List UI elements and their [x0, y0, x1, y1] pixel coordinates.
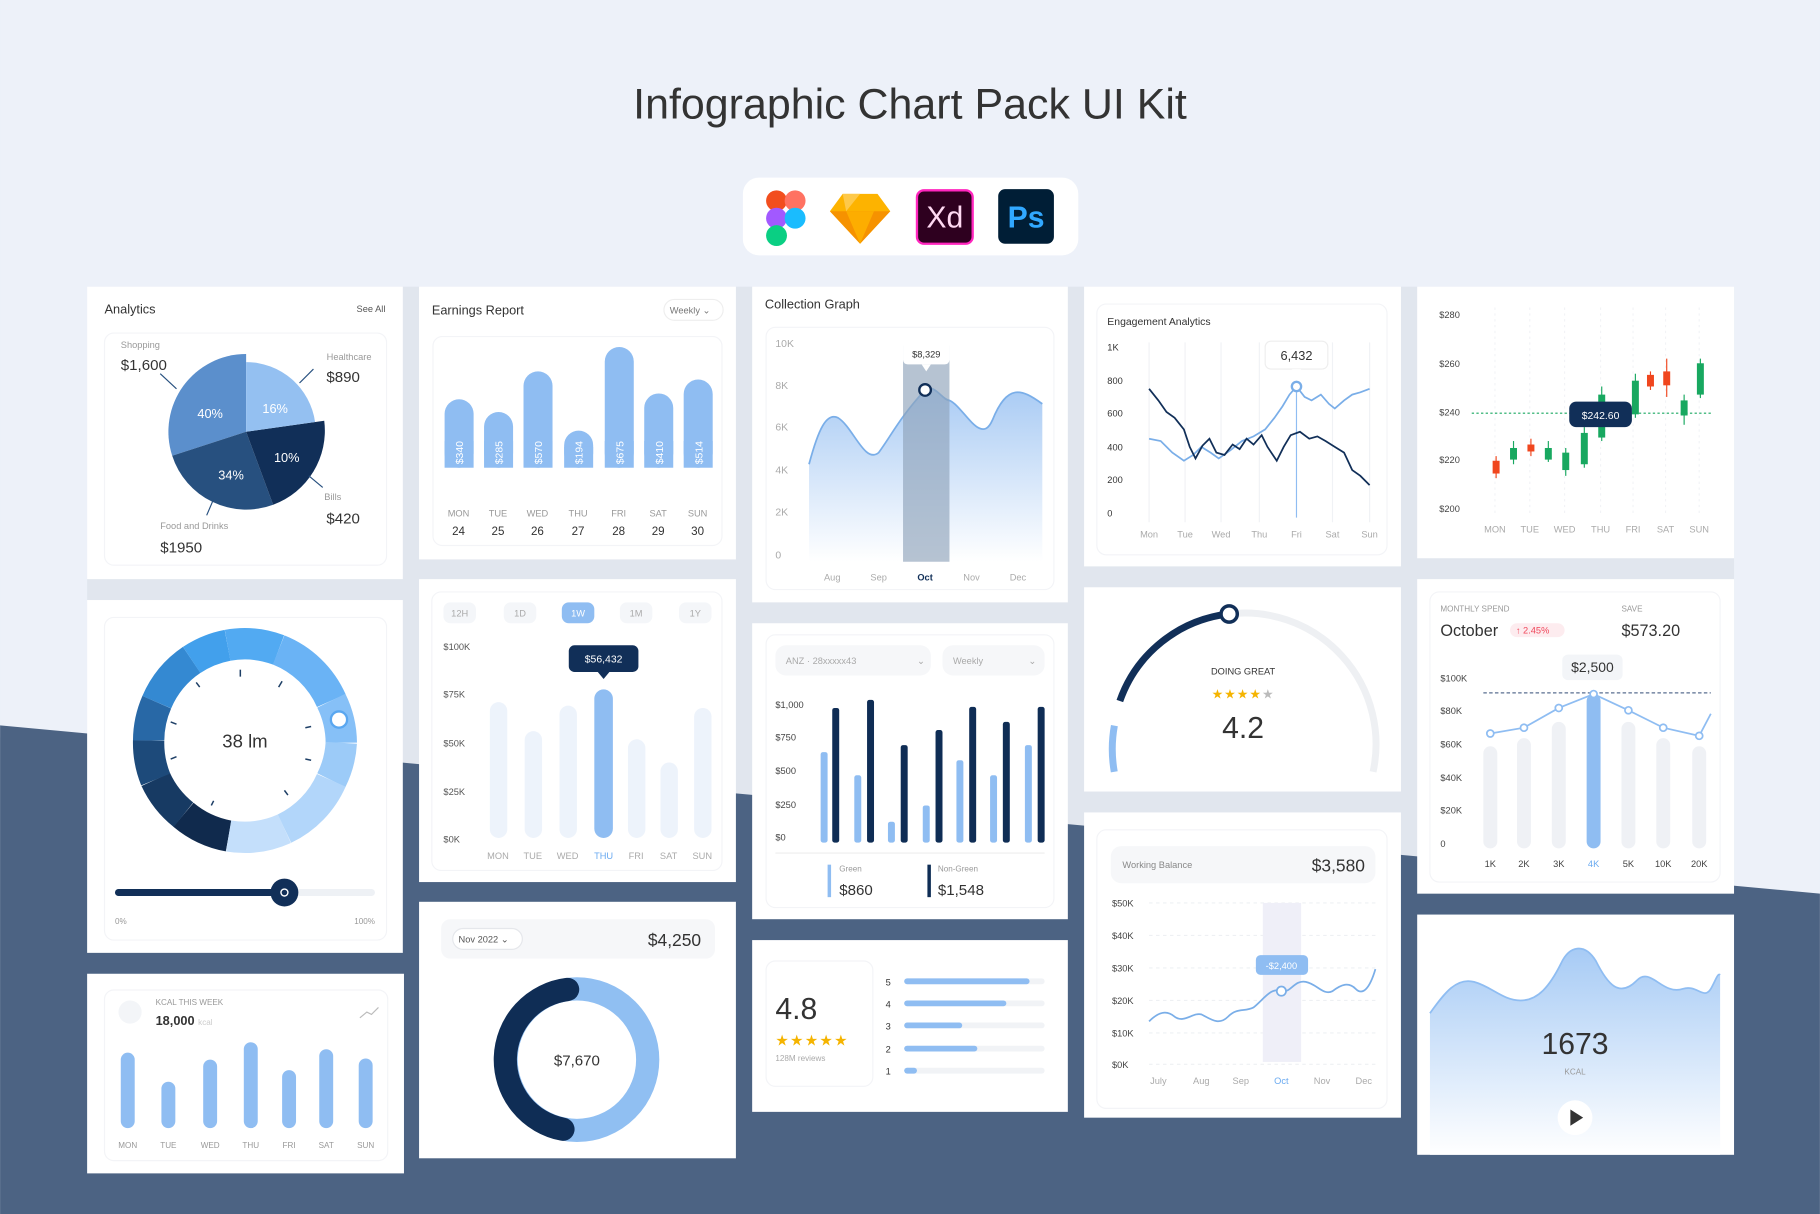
panel: earnings report: SUN	[688, 508, 707, 518]
panel: collection graph: 4K	[775, 466, 788, 477]
panel: working balance: $50K	[1112, 898, 1134, 908]
panel: analytics pie: Healthcare	[327, 352, 371, 362]
panel: revenue bars: 1W	[571, 608, 585, 618]
panel: engagement analytics: 800	[1107, 376, 1123, 386]
panel: analytics pie: $420	[326, 510, 360, 527]
slider: 100%	[354, 917, 375, 926]
panel: kcal week: THU	[242, 1141, 259, 1150]
panel: earnings report: THU	[569, 508, 588, 518]
panel: monthly spend: SAVE	[1621, 605, 1643, 614]
panel: revenue bars: WED	[557, 851, 579, 861]
slider: 0%	[115, 917, 127, 926]
panel: earnings report: $285	[495, 441, 506, 464]
panel: rating: 5	[886, 977, 891, 987]
panel: green bars: Weekly	[953, 656, 984, 666]
panel: monthly spend: 20K	[1691, 859, 1708, 869]
panel: kcal wave	[1417, 915, 1734, 1155]
panel: green bars: ANZ · 28xxxxx43	[786, 656, 856, 666]
panel: collection graph	[752, 287, 1068, 602]
panel: monthly spend: 10K	[1655, 859, 1672, 869]
panel: working balance: $30K	[1112, 963, 1134, 973]
panel: green bars: ⌄	[1028, 656, 1036, 666]
panel: donut: $4,250	[648, 930, 701, 950]
panel: monthly spend: $573.20	[1621, 622, 1680, 640]
panel: donut: $7,670	[554, 1052, 600, 1069]
panel: ring gauge	[87, 600, 403, 953]
panel: rating: ★★★★★	[775, 1033, 849, 1050]
panel: monthly spend: $60K	[1440, 739, 1463, 749]
panel: engagement analytics	[1084, 287, 1401, 566]
panel: revenue bars: FRI	[629, 851, 644, 861]
panel: monthly spend: MONTHLY SPEND	[1440, 605, 1510, 614]
panel: candlestick: $220	[1439, 455, 1460, 465]
panel: earnings report: $194	[575, 441, 586, 464]
pie chart: 34%	[218, 467, 244, 482]
icon: figma	[766, 190, 806, 246]
panel: candlestick: FRI	[1626, 525, 1641, 535]
tooltip: $8,329	[912, 349, 940, 359]
panel: earnings report: 27	[572, 525, 585, 538]
panel: engagement analytics: Fri	[1291, 529, 1302, 539]
panel: candlestick: SUN	[1689, 525, 1709, 535]
tooltip	[569, 645, 638, 679]
panel: green bars: $750	[775, 732, 796, 742]
panel: donut: Nov 2022 ⌄	[459, 934, 509, 944]
panel: earnings report: $675	[615, 441, 626, 464]
panel: rating: 1	[886, 1067, 891, 1077]
panel: kcal wave: KCAL	[1564, 1068, 1586, 1077]
panel: engagement analytics: Mon	[1140, 529, 1158, 539]
panel: rating: 4.8	[775, 993, 817, 1026]
panel: analytics pie: Bills	[324, 492, 342, 502]
panel: revenue bars: 1Y	[690, 608, 701, 618]
panel: working balance: Aug	[1193, 1076, 1210, 1086]
panel: working balance: $0K	[1112, 1060, 1129, 1070]
panel: earnings report: 28	[612, 525, 625, 538]
panel: revenue bars: SAT	[660, 851, 678, 861]
panel: revenue bars: 1M	[630, 608, 643, 618]
icon: play	[1558, 1100, 1592, 1135]
panel: engagement analytics: 1K	[1107, 343, 1119, 353]
panel: earnings report: Earnings Report	[432, 303, 524, 318]
panel: earnings report: WED	[527, 508, 549, 518]
panel: kcal week: 18,000 kcal	[156, 1013, 213, 1028]
panel: monthly spend: 0	[1440, 839, 1446, 849]
panel: collection graph: 8K	[775, 381, 788, 392]
pie chart: 10%	[274, 450, 300, 465]
panel: collection graph: Dec	[1010, 572, 1027, 582]
panel: green bars: $1,000	[775, 700, 804, 710]
panel: candlestick: SAT	[1657, 525, 1675, 535]
panel: rating: 128M reviews	[775, 1054, 825, 1063]
panel: green bars: $0	[775, 832, 786, 842]
panel: green bars: $1,548	[938, 882, 984, 899]
panel: collection graph: Oct	[917, 572, 933, 582]
panel: ring gauge: 38 lm	[222, 730, 268, 751]
panel: revenue bars: $50K	[443, 738, 466, 748]
panel: analytics pie: $890	[326, 369, 360, 386]
panel: working balance: Sep	[1233, 1076, 1249, 1086]
panel: monthly spend: 5K	[1623, 859, 1635, 869]
panel: engagement analytics: 600	[1107, 409, 1123, 419]
panel: working balance: Oct	[1274, 1076, 1289, 1086]
panel: working balance	[1084, 812, 1401, 1118]
panel: working balance: Working Balance	[1122, 860, 1192, 870]
panel: rating: 3	[886, 1021, 891, 1031]
slider	[115, 879, 375, 926]
icon: ps	[998, 189, 1054, 244]
panel: collection graph: 0	[775, 550, 781, 561]
panel: monthly spend: 2K	[1518, 859, 1530, 869]
pie chart: 40%	[197, 406, 223, 421]
panel: half gauge: 4.2	[1222, 712, 1264, 745]
panel: collection graph: Sep	[870, 572, 887, 582]
panel: earnings report: 29	[652, 525, 665, 538]
price label: $242.60	[1582, 411, 1620, 422]
panel: analytics pie: Analytics	[105, 301, 156, 316]
icon: xd	[917, 190, 973, 244]
panel: monthly spend: $20K	[1440, 806, 1463, 816]
tooltip: 6,432	[1281, 348, 1312, 363]
panel: candlestick: $280	[1439, 310, 1460, 320]
panel: candlestick: $200	[1439, 504, 1460, 514]
panel: monthly spend: $40K	[1440, 773, 1463, 783]
panel: kcal week: SAT	[319, 1141, 334, 1150]
panel: donut	[419, 902, 736, 1158]
panel: earnings report: 25	[492, 525, 504, 538]
panel: monthly spend: $100K	[1440, 673, 1468, 683]
panel: green bars: $500	[775, 766, 796, 776]
panel: analytics pie: Shopping	[121, 340, 160, 350]
panel: revenue bars	[419, 579, 736, 882]
panel: monthly spend	[1417, 579, 1734, 894]
panel: rating: 2	[886, 1045, 891, 1055]
panel: working balance: $10K	[1112, 1028, 1134, 1038]
panel: engagement analytics: Sat	[1326, 529, 1340, 539]
panel: candlestick: MON	[1484, 525, 1506, 535]
tooltip: $2,500	[1571, 659, 1614, 675]
panel: revenue bars: $0K	[443, 835, 461, 845]
tooltip: -$2,400	[1266, 961, 1297, 971]
ring	[149, 644, 341, 837]
panel: candlestick: THU	[1591, 525, 1610, 535]
panel: engagement analytics: Tue	[1177, 529, 1193, 539]
panel: working balance: July	[1150, 1076, 1167, 1086]
panel: revenue bars: SUN	[692, 851, 712, 861]
panel: candlestick: $260	[1439, 359, 1460, 369]
panel: analytics pie: $1,600	[121, 357, 167, 374]
panel: revenue bars: $75K	[443, 690, 466, 700]
panel: candlestick: WED	[1554, 525, 1576, 535]
panel: half gauge: ★★★★★	[1212, 687, 1275, 702]
panel: earnings report: $340	[455, 441, 466, 464]
panel: kcal wave: 1673	[1541, 1028, 1609, 1061]
panel: rating	[752, 940, 1068, 1112]
panel: analytics pie	[87, 287, 403, 579]
panel: monthly spend: 1K	[1485, 859, 1497, 869]
panel: candlestick	[1417, 287, 1734, 558]
panel: collection graph: 2K	[775, 507, 788, 518]
panel: revenue bars: $100K	[443, 642, 471, 652]
price label	[1569, 402, 1632, 427]
panel: revenue bars: TUE	[524, 851, 542, 861]
tool icons	[743, 178, 1078, 255]
panel: green bars: $250	[775, 800, 796, 810]
panel: revenue bars: MON	[487, 851, 509, 861]
panel: engagement analytics: 400	[1107, 442, 1123, 452]
panel: kcal week: KCAL THIS WEEK	[156, 998, 224, 1007]
panel: revenue bars: 1D	[514, 608, 526, 618]
panel: kcal week: SUN	[357, 1141, 374, 1150]
panel: collection graph: Aug	[824, 572, 840, 582]
panel: green bars: ⌄	[917, 656, 925, 666]
icon: xd: Xd	[926, 201, 963, 234]
panel: revenue bars: THU	[594, 851, 613, 861]
panel: working balance: Nov	[1314, 1076, 1331, 1086]
panel: monthly spend: ↑ 2.45%	[1516, 626, 1549, 636]
panel: collection graph: Nov	[963, 572, 980, 582]
panel: earnings report	[419, 287, 736, 559]
panel: engagement analytics: 200	[1107, 475, 1123, 485]
panel: revenue bars: 12H	[451, 608, 468, 618]
panel: earnings report: $410	[655, 441, 666, 464]
panel: half gauge	[1084, 587, 1401, 792]
panel: collection graph: 10K	[775, 339, 794, 350]
panel: rating: 4	[886, 999, 891, 1009]
panel: revenue bars: $25K	[443, 787, 466, 797]
panel: earnings report: 26	[531, 525, 544, 538]
panel: analytics pie: Food and Drinks	[160, 521, 229, 531]
panel: candlestick: TUE	[1520, 525, 1539, 535]
panel: engagement analytics: Wed	[1212, 529, 1230, 539]
panel: candlestick: $240	[1439, 407, 1460, 417]
pie chart: 16%	[262, 401, 288, 416]
panel: green bars: $860	[839, 882, 873, 899]
panel: green bars	[752, 623, 1068, 919]
panel: working balance: $3,580	[1312, 856, 1365, 876]
pie chart	[160, 354, 325, 515]
panel: earnings report: MON	[448, 508, 469, 518]
panel: kcal week: WED	[201, 1141, 220, 1150]
panel: monthly spend: $80K	[1440, 706, 1463, 716]
panel: collection graph: 6K	[775, 423, 788, 434]
panel: earnings report: 30	[691, 525, 704, 538]
panel: working balance: $20K	[1112, 996, 1134, 1006]
panel: kcal week: TUE	[160, 1141, 177, 1150]
icon: ps: Ps	[1008, 201, 1045, 234]
panel: engagement analytics: Engagement Analytics	[1107, 317, 1211, 328]
tooltip	[1562, 655, 1623, 680]
panel: half gauge: DOING GREAT	[1211, 666, 1276, 676]
panel: collection graph: Collection Graph	[765, 297, 860, 312]
panel: kcal week: FRI	[283, 1141, 296, 1150]
title: Infographic Chart Pack UI Kit	[633, 80, 1187, 128]
tooltip	[1265, 341, 1328, 375]
panel: earnings report: Weekly ⌄	[670, 305, 710, 315]
panel: earnings report: TUE	[489, 508, 507, 518]
panel: analytics pie: See All	[357, 304, 385, 314]
panel: monthly spend: 4K	[1588, 859, 1600, 869]
panel: earnings report: $570	[534, 441, 545, 464]
panel: green bars: Non-Green	[938, 865, 978, 874]
panel: analytics pie: $1950	[160, 539, 202, 556]
panel: engagement analytics: 0	[1107, 508, 1112, 518]
panel: monthly spend: October	[1440, 622, 1499, 640]
panel: green bars: Green	[839, 865, 862, 874]
panel: earnings report: SAT	[649, 508, 667, 518]
tooltip	[1256, 955, 1308, 975]
panel: monthly spend: 3K	[1553, 859, 1565, 869]
panel: engagement analytics: Thu	[1251, 529, 1267, 539]
panel: earnings report: FRI	[611, 508, 626, 518]
tooltip	[903, 341, 949, 371]
panel: earnings report: 24	[452, 525, 466, 538]
tooltip: $56,432	[585, 655, 623, 666]
panel: kcal week: MON	[118, 1141, 137, 1150]
panel: working balance: Dec	[1356, 1076, 1372, 1086]
panel: engagement analytics: Sun	[1361, 529, 1378, 539]
icon: sketch	[830, 194, 890, 244]
panel: earnings report: $514	[694, 441, 705, 464]
panel: working balance: $40K	[1112, 931, 1134, 941]
panel: kcal week	[87, 974, 404, 1173]
